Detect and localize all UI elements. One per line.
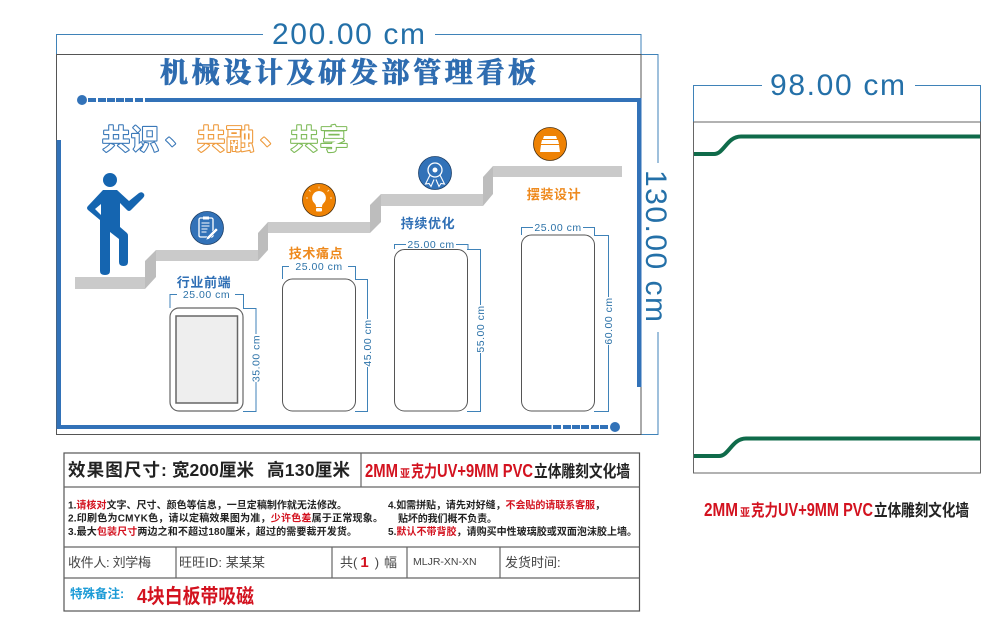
notes left column: 3.最大包装尺寸两边之和不超过180厘米，超过的需要裁开发货。 (68, 525, 357, 538)
stairs (75, 166, 622, 289)
icon: person climbing stairs (87, 173, 144, 275)
notes left column: 2.印刷色为CMYK色，请以定稿效果图为准，少许色差属于正常现象。 (68, 512, 383, 524)
remark value: 4块白板带吸磁 (137, 585, 254, 608)
field: recipient: 收件人: 刘学梅 (68, 555, 151, 570)
caption: material: 2MM (704, 500, 738, 520)
heading: effect size: 宽200厘米 (172, 460, 254, 480)
heading: effect size: 效果图尺寸 (68, 460, 160, 480)
slogan (102, 119, 348, 155)
dimension: height 130.00 cm (620, 54, 672, 434)
field: wangwang id: 旺旺ID: 某某某 (179, 555, 265, 570)
title: 机械设计及研发部管理看板 (160, 57, 536, 89)
icon: medal (418, 156, 452, 190)
caption: material: 立体雕刻文化墙 (874, 500, 969, 520)
caption: material: 克力 (751, 501, 778, 520)
heading: material (365, 461, 630, 481)
top and right frame (77, 95, 642, 387)
label: 行业前端: 行业前端 (177, 275, 231, 290)
icon: stacked packages (534, 128, 566, 160)
label: 技术痛点: 技术痛点 (289, 246, 343, 261)
caption: material: 亚 (740, 506, 750, 519)
bottom and left frame (56, 140, 620, 432)
whiteboard 1: 25 by 35 cm (170, 289, 262, 412)
slogan: 共识、 (102, 119, 193, 155)
notes right column: 5.默认不带背胶，请购买中性玻璃胶或双面泡沫胶上墙。 (388, 525, 637, 538)
field: code: MLJR-XN-XN (413, 556, 477, 568)
panel: side view (694, 69, 980, 473)
green bottom edge (694, 438, 980, 456)
heading: material: 立体雕刻文化墙 (534, 461, 630, 481)
slogan: 共享 (290, 124, 348, 155)
notes right column: 4.如需拼贴，请先对好缝，不会贴的请联系客服， (388, 498, 605, 512)
icon: light bulb (302, 184, 336, 216)
remark label: 特殊备注: (70, 586, 124, 601)
field: ship time: 发货时间: (505, 555, 561, 570)
heading: material: 克力 (411, 462, 437, 481)
dimension: width 98.00 cm: 98.00 cm (770, 69, 905, 102)
caption: material (704, 500, 969, 520)
heading: material: 亚 (400, 467, 410, 480)
panel: board front view (56, 54, 642, 434)
heading: effect size: : (161, 460, 167, 480)
icon: clipboard (190, 212, 224, 244)
heading: material: UV+9MM PVC (437, 461, 533, 481)
whiteboard 3: 25 by 55 cm: 25.00 cm (407, 239, 455, 251)
dimension: height 130.00 cm: 130.00 cm (639, 170, 672, 322)
whiteboard 4: 25 by 60 cm: 25.00 cm (534, 222, 582, 234)
whiteboard 1: 25 by 35 cm: 35.00 cm (250, 335, 262, 382)
side view outline (694, 122, 980, 473)
heading: effect size (68, 460, 350, 480)
whiteboard 2: 25 by 45 cm: 45.00 cm (362, 319, 374, 367)
whiteboard 3: 25 by 55 cm (394, 239, 487, 412)
caption: material: UV+9MM PVC (778, 500, 873, 520)
table: order information (64, 453, 640, 611)
label: 摆装设计: 摆装设计 (527, 187, 581, 202)
dimension: width 98.00 cm (694, 69, 980, 122)
heading: effect size: 高130厘米 (267, 460, 350, 480)
whiteboard 1: 25 by 35 cm: 25.00 cm (183, 289, 230, 301)
dimension: width 200.00 cm: 200.00 cm (272, 18, 425, 51)
slogan: 共融、 (197, 119, 288, 155)
whiteboard 4: 25 by 60 cm (522, 222, 615, 412)
whiteboard 2: 25 by 45 cm (282, 261, 374, 412)
whiteboard 3: 25 by 55 cm: 55.00 cm (475, 305, 487, 353)
heading: material: 2MM (365, 461, 398, 481)
green top edge (694, 136, 980, 154)
dimension: width 200.00 cm (56, 18, 641, 100)
notes left column: 1.请核对文字、尺寸、颜色等信息，一旦定稿制作就无法修改。 (68, 498, 347, 512)
field: quantity: 共(1 ) 幅 (340, 554, 397, 571)
notes left column (68, 498, 383, 538)
whiteboard 2: 25 by 45 cm: 25.00 cm (295, 261, 343, 273)
label: 持续优化: 持续优化 (401, 216, 455, 231)
notes right column: 贴坏的我们概不负责。 (398, 512, 497, 525)
whiteboard 4: 25 by 60 cm: 60.00 cm (603, 297, 615, 345)
notes right column (388, 498, 637, 538)
